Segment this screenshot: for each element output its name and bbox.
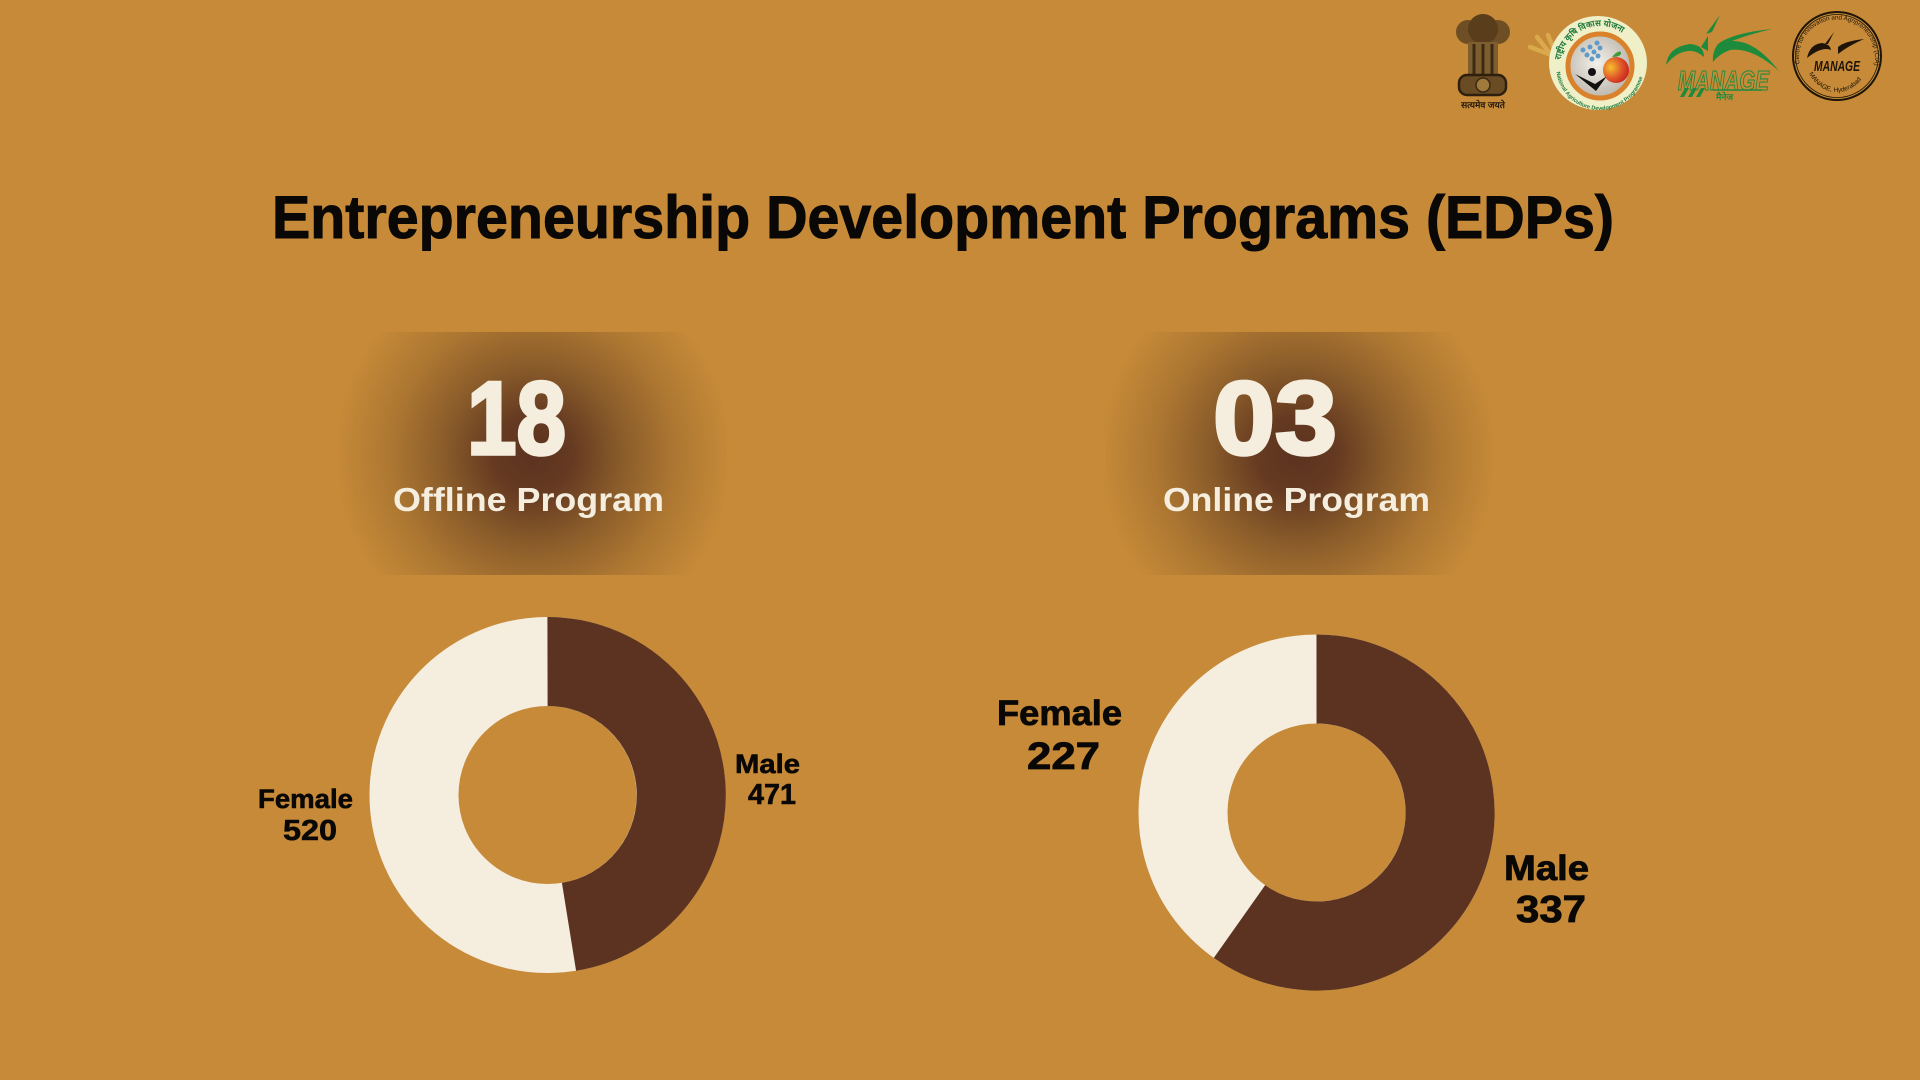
label: offline male count [735,749,800,811]
donut chart: offline participants by gender [414,661,681,928]
logo: MANAGE: मैनेज [1715,91,1733,102]
label: online female count [997,694,1122,778]
panel: offline program stat: Offline Program [393,481,664,518]
logo: MANAGE: MANAGE [1678,65,1770,96]
label: offline male count: Male [735,749,800,779]
label: online male count: 337 [1516,889,1586,931]
logo: national emblem: सत्यमेव जयते [1460,99,1506,110]
label: offline female count: Female [258,784,353,814]
logo: centre for innovation seal: Centre for Innovation and Agripreneurship (CIA) [1794,15,1880,66]
number: 18 offline programs: 18 [467,361,566,477]
label: offline male count: 471 [748,779,796,811]
label: offline female count [258,784,353,847]
label: online female count: 227 [1027,736,1100,778]
number: 03 online programs: 03 [1213,361,1337,477]
label: online female count: Female [997,694,1122,733]
panel: online program stat: Online Program [1163,481,1430,518]
logo: MANAGE [1666,15,1779,102]
logo: centre for innovation seal [1792,11,1882,101]
logo: national agriculture development programme: National Agriculture Development Programme [1556,72,1642,110]
title: Entrepreneurship Development Programs (EDPs) [272,184,1614,251]
logo: national agriculture development programme [1528,16,1647,110]
logo: national agriculture development programme: राष्ट्रीय कृषि विकास योजना [1555,19,1626,60]
label: offline female count: 520 [283,815,337,847]
logo: centre for innovation seal: MANAGE [1814,58,1861,75]
panel: offline program stat [340,332,727,575]
logo: national emblem [1456,14,1510,110]
panel: online program stat [1105,332,1492,575]
logo: centre for innovation seal: MANAGE, Hyderabad [1809,72,1861,94]
label: online male count: Male [1504,849,1589,888]
donut chart: online participants by gender [1183,679,1450,946]
label: online male count [1504,849,1589,931]
